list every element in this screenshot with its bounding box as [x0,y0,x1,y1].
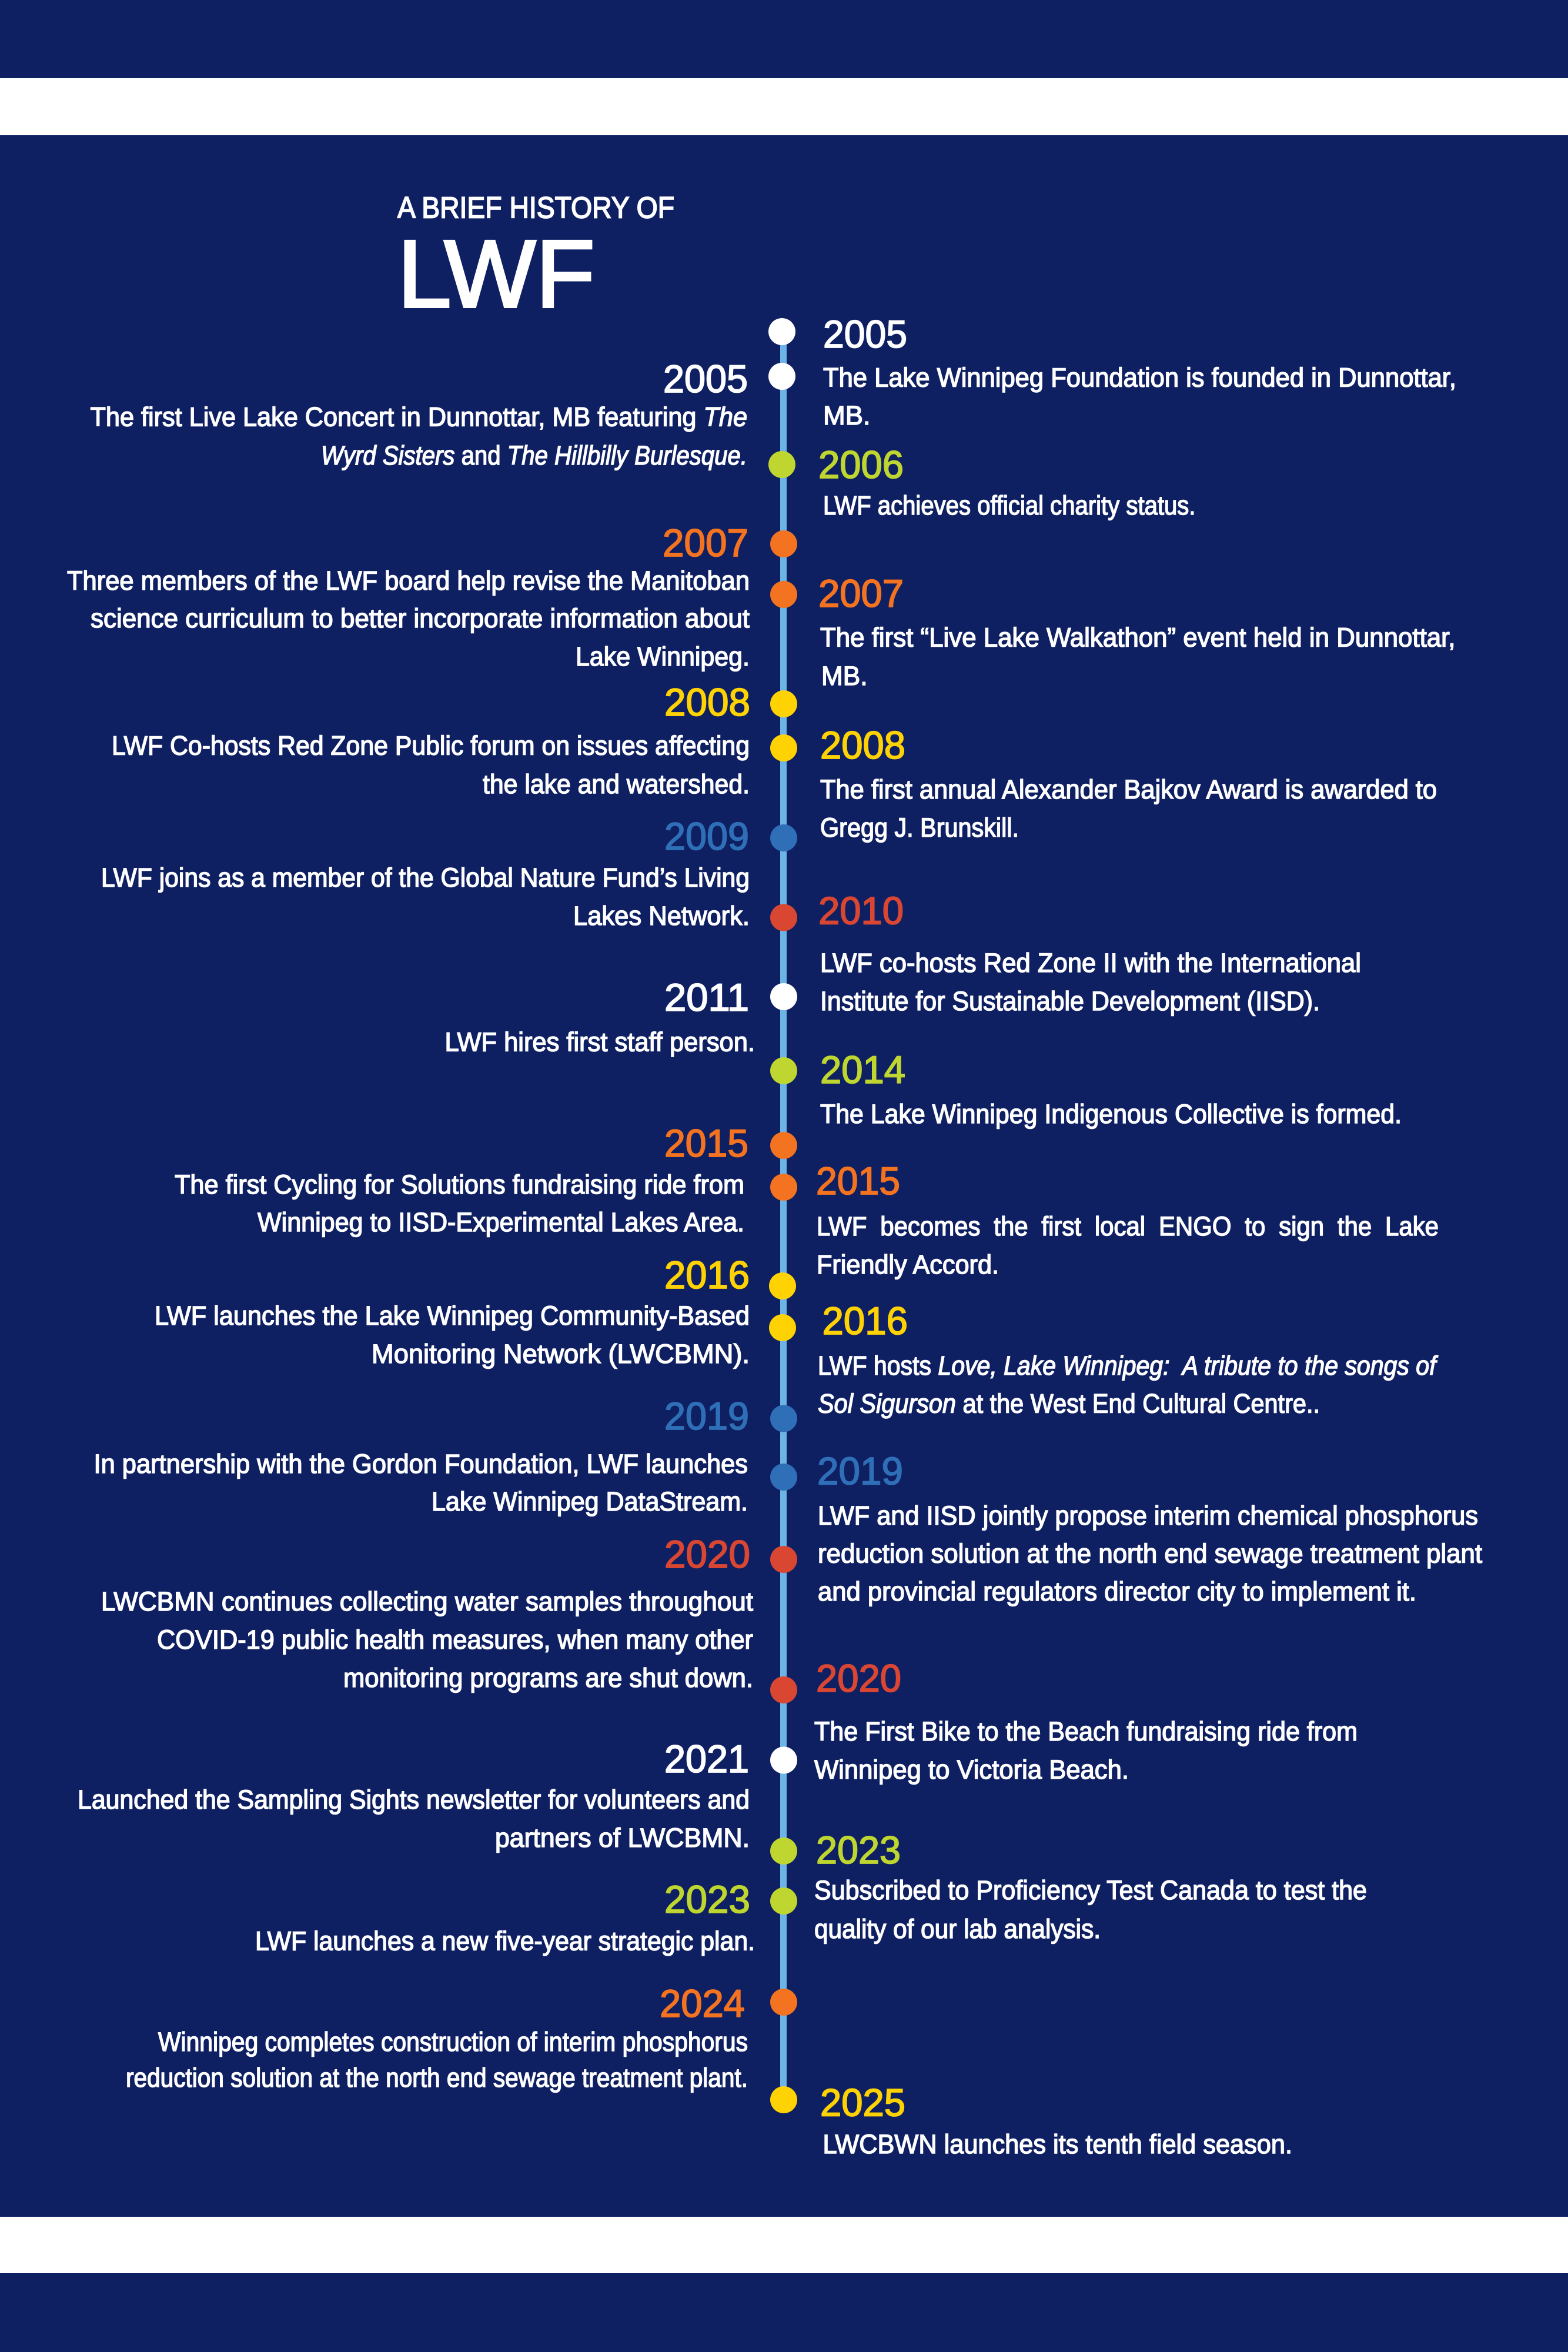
right entry: 2020 [814,1656,1358,1785]
right entry: 2015 [816,1159,1439,1279]
description: The first Live Lake Concert in Dunnottar, MB featuring The [91,402,747,432]
year: 2024 [660,1982,745,2025]
bottom navy band [0,2273,1568,2352]
left entry: 2011 [444,975,755,1057]
timeline dots [768,318,797,2113]
description [94,1449,748,1516]
year: 2015 [664,1121,748,1165]
description [818,1501,1482,1606]
description [67,566,750,671]
year: 2005 [823,312,907,356]
description: monitoring programs are shut down. [343,1663,753,1693]
year: 2025 [820,2080,905,2124]
description [112,730,750,799]
left entry: 2005 [91,357,748,470]
year: 2014 [820,1048,905,1091]
description: Subscribed to Proficiency Test Canada to test the [814,1875,1367,1905]
description: LWF becomes the first local ENGO to sign the Lake [817,1211,1439,1241]
description [814,1875,1367,1944]
description: The first “Live Lake Walkathon” event held in Dunnottar, [820,622,1456,653]
description: LWCBWN launches its tenth field season. [823,2129,1292,2159]
description: The First Bike to the Beach fundraising ride from [814,1716,1358,1746]
right entry: 2010 [818,889,1361,1016]
title [397,191,674,328]
description: LWF Co-hosts Red Zone Public forum on issues affecting [112,730,750,761]
description [101,863,750,931]
year: 2005 [663,357,748,400]
left entry: 2007 [67,521,750,671]
description: and provincial regulators director city to implement it. [818,1576,1416,1606]
title main: LWF [397,220,595,328]
right entry: 2019 [817,1449,1482,1606]
year: 2020 [816,1656,901,1700]
description: LWF and IISD jointly propose interim chemical phosphorus [818,1501,1478,1531]
right entry: 2025 [820,2080,1292,2159]
top navy band [0,0,1568,78]
description: LWF launches a new five-year strategic plan. [255,1926,755,1956]
description: LWCBMN continues collecting water samples throughout [101,1586,753,1616]
year: 2008 [820,723,905,767]
description: Wyrd Sisters and The Hillbilly Burlesque. [321,440,747,470]
description: quality of our lab analysis. [814,1914,1101,1944]
year: 2019 [817,1449,903,1492]
year: 2016 [664,1253,750,1297]
right entry: 2006 [818,443,1196,520]
description [820,774,1437,843]
year: 2006 [818,443,904,486]
description [814,1716,1358,1785]
description: MB. [823,400,870,430]
description: Winnipeg to IISD-Experimental Lakes Area. [258,1207,744,1237]
description: Lake Winnipeg DataStream. [432,1486,748,1516]
description: MB. [821,661,868,691]
description: partners of LWCBMN. [495,1823,750,1853]
description: The first annual Alexander Bajkov Award is awarded to [820,774,1437,804]
description: COVID-19 public health measures, when many other [157,1625,753,1655]
description: reduction solution at the north end sewage treatment plant. [126,2063,748,2093]
description: Monitoring Network (LWCBMN). [372,1339,750,1369]
description: In partnership with the Gordon Foundation, LWF launches [94,1449,748,1479]
description: Lake Winnipeg. [576,642,750,671]
description [101,1586,753,1693]
year: 2011 [664,975,749,1019]
description: Launched the Sampling Sights newsletter for volunteers and [78,1785,750,1815]
description: The Lake Winnipeg Indigenous Collective is formed. [820,1099,1402,1129]
right entry: 2023 [814,1828,1367,1944]
left entry: 2021 [78,1737,750,1853]
year: 2023 [816,1828,901,1872]
right entry: 2014 [820,1048,1402,1129]
description: reduction solution at the north end sewage treatment plant [818,1538,1482,1569]
description: Winnipeg completes construction of interim phosphorus [158,2027,748,2057]
description: Gregg J. Brunskill. [820,813,1019,843]
description: LWF co-hosts Red Zone II with the International [820,948,1361,978]
left entry: 2015 [175,1121,748,1237]
year: 2021 [664,1737,749,1780]
description [91,402,747,470]
description: LWF achieves official charity status. [823,490,1196,520]
year: 2010 [818,889,904,933]
left entry: 2023 [255,1877,755,1956]
description: The Lake Winnipeg Foundation is founded in Dunnottar, [823,362,1456,393]
description: science curriculum to better incorporate information about [91,603,750,633]
year: 2016 [822,1299,908,1342]
description: Three members of the LWF board help revise the Manitoban [67,566,750,596]
description [126,2027,748,2093]
right entry: 2008 [820,723,1437,843]
year: 2007 [663,521,748,564]
year: 2008 [664,680,750,724]
year: 2007 [818,572,904,615]
right entry: 2007 [818,572,1456,691]
right entry: 2016 [818,1299,1439,1418]
description: Institute for Sustainable Development (IISD). [820,986,1320,1016]
description [155,1301,750,1369]
description: LWF hires first staff person. [444,1027,755,1057]
description [817,1211,1439,1279]
description [823,362,1456,430]
left entry: 2016 [155,1253,750,1369]
description: the lake and watershed. [483,769,750,799]
description: The first Cycling for Solutions fundraising ride from [175,1170,744,1200]
right entry: 2005 [823,312,1456,430]
description: Lakes Network. [573,901,750,931]
description [175,1170,744,1237]
left entry: 2009 [101,814,750,931]
left entry: 2008 [112,680,750,799]
timeline spine [780,332,787,2100]
description: LWF hosts Love, Lake Winnipeg: A tribute to the songs of [818,1351,1439,1381]
year: 2020 [664,1532,750,1576]
year: 2009 [664,814,749,858]
year: 2019 [664,1394,749,1438]
left entry: 2020 [101,1532,753,1693]
description: Winnipeg to Victoria Beach. [814,1755,1129,1785]
description: Sol Sigurson at the West End Cultural Centre.. [818,1389,1320,1418]
description [78,1785,750,1853]
description [818,1351,1439,1418]
left entry: 2019 [94,1394,749,1516]
description: LWF launches the Lake Winnipeg Community-Based [155,1301,750,1331]
description [820,622,1456,691]
title kicker: A BRIEF HISTORY OF [397,191,674,225]
description [820,948,1361,1016]
left entry: 2024 [126,1982,748,2093]
description: LWF joins as a member of the Global Nature Fund’s Living [101,863,750,893]
description: Friendly Accord. [817,1250,999,1279]
year: 2015 [816,1159,900,1202]
year: 2023 [664,1877,750,1921]
